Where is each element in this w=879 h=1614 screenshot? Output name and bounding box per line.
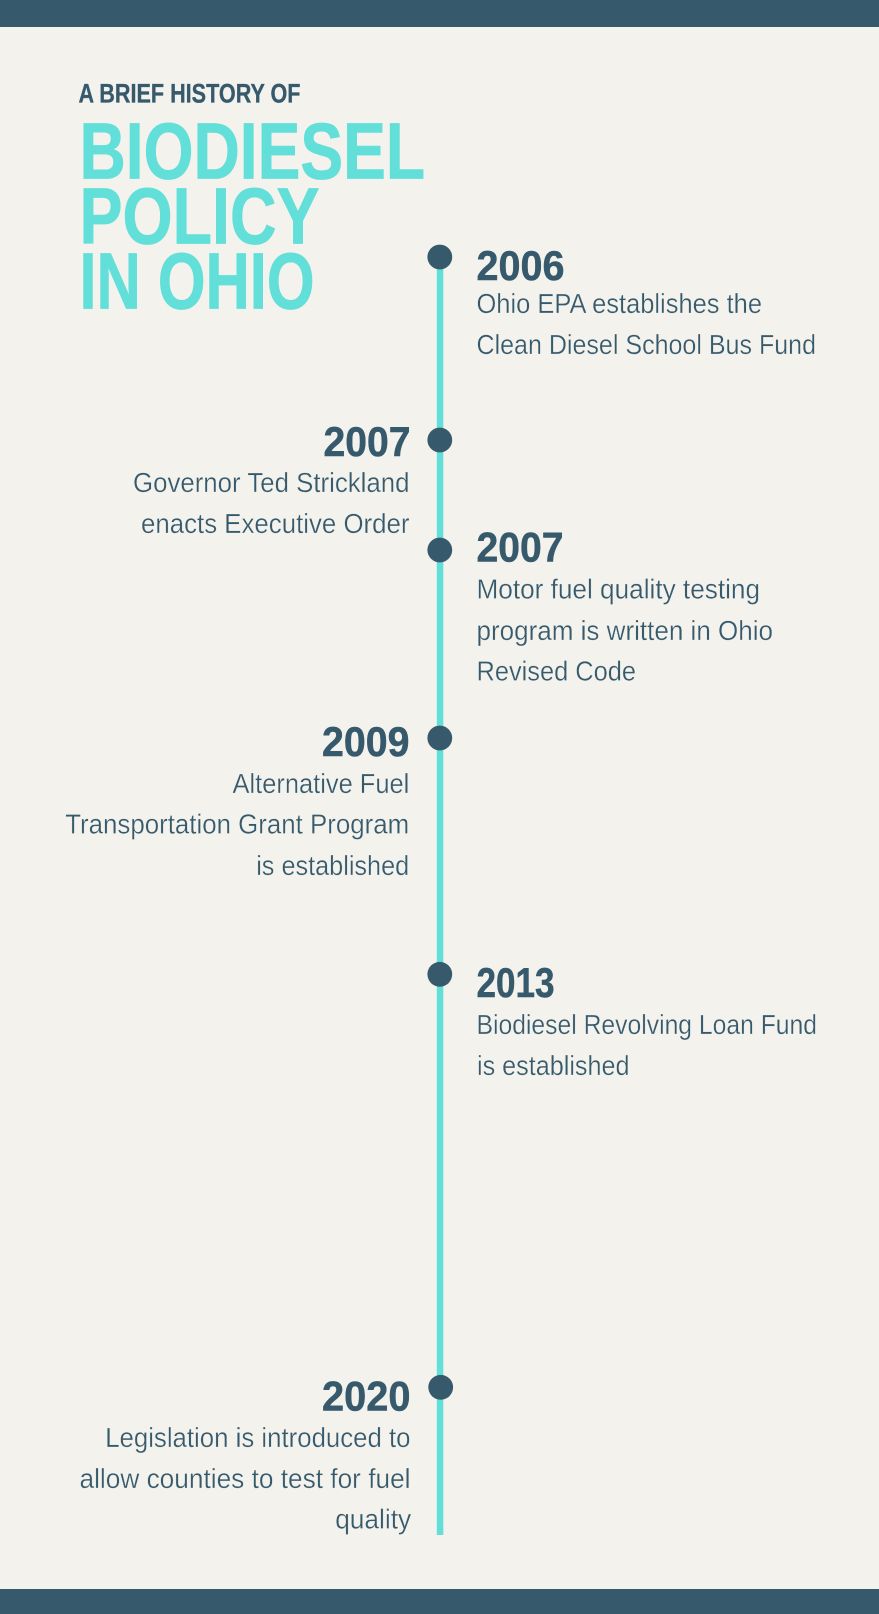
event 2007 fuel testing: Motor fuel quality testing <box>476 574 760 605</box>
event 2013 <box>427 959 817 1081</box>
event 2020: quality <box>335 1503 411 1534</box>
top bar <box>0 0 879 27</box>
event 2006: Ohio EPA establishes the <box>476 288 762 319</box>
event 2013: 2013 <box>476 959 554 1006</box>
bottom bar <box>0 1589 879 1614</box>
event 2006 <box>427 242 816 360</box>
event 2020 <box>80 1372 453 1534</box>
event 2007 fuel testing <box>427 524 773 687</box>
event 2020: 2020 <box>322 1372 410 1419</box>
event 2006: 2006 <box>476 242 564 289</box>
event 2009: 2009 <box>322 718 410 765</box>
event 2013: is established <box>477 1050 630 1081</box>
event 2009: Alternative Fuel <box>232 768 409 799</box>
main title: BIODIESEL <box>80 107 425 196</box>
event 2006: Clean Diesel School Bus Fund <box>476 329 816 360</box>
event 2007 executive order <box>133 418 452 539</box>
event 2007 fuel testing: Revised Code <box>476 656 636 687</box>
event 2013: Biodiesel Revolving Loan Fund <box>476 1009 817 1040</box>
event 2007 executive order: 2007 <box>324 418 410 465</box>
event 2020: allow counties to test for fuel <box>80 1463 410 1494</box>
title block <box>78 79 425 326</box>
event 2007 fuel testing: program is written in Ohio <box>476 615 773 646</box>
main title <box>80 107 425 326</box>
subtitle: A BRIEF HISTORY OF <box>78 79 300 109</box>
main title: POLICY <box>80 172 320 261</box>
event 2007 fuel testing: 2007 <box>476 524 564 571</box>
event 2007 executive order: enacts Executive Order <box>141 508 410 539</box>
event 2020: Legislation is introduced to <box>105 1422 410 1453</box>
event 2009: is established <box>256 850 409 881</box>
event 2007 executive order: Governor Ted Strickland <box>133 467 410 498</box>
timeline line <box>437 257 443 1535</box>
event 2009 <box>65 718 452 881</box>
main title: IN OHIO <box>80 237 314 326</box>
event 2009: Transportation Grant Program <box>65 809 409 840</box>
